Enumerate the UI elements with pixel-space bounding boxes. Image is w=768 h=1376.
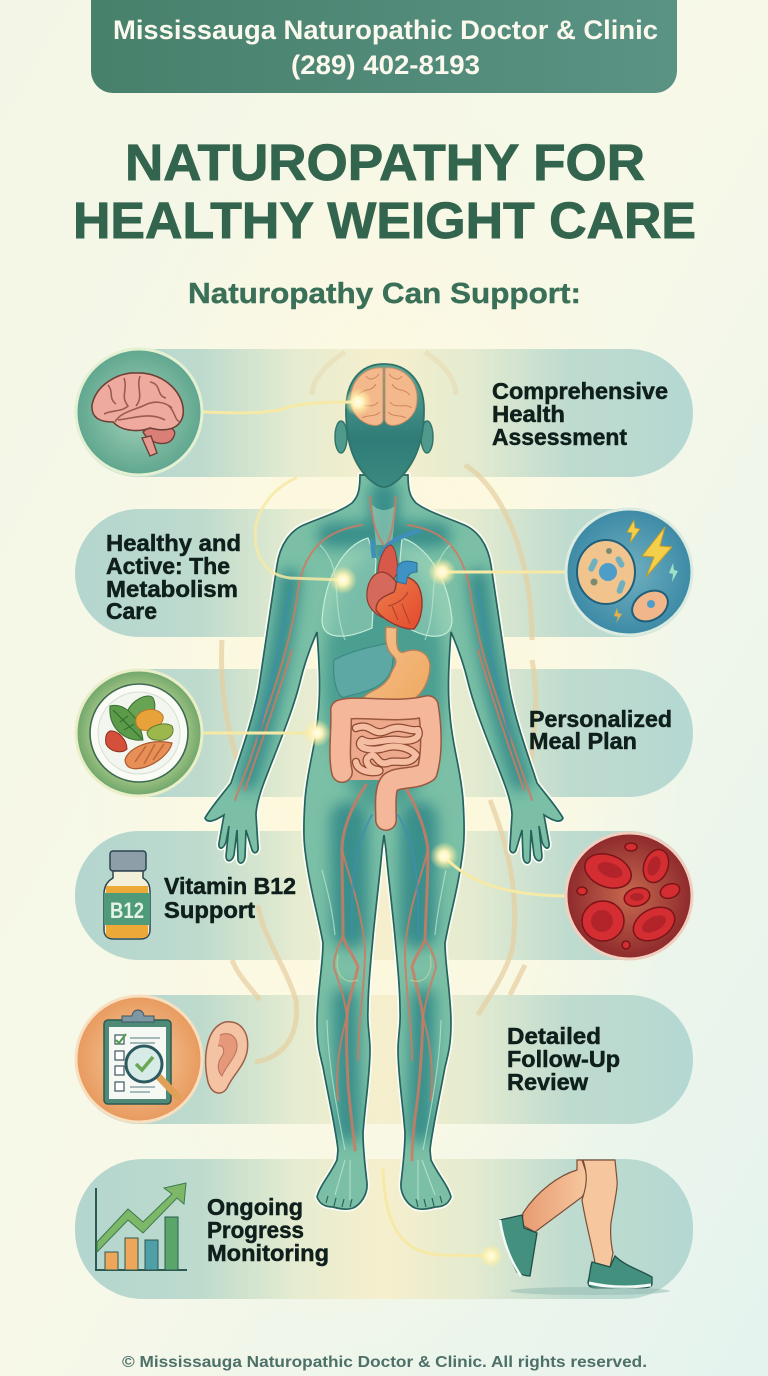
label: metabolism care: Healthy and: [106, 530, 241, 556]
body silhouette: [205, 475, 563, 1209]
label: comprehensive health assessment: Health: [492, 401, 565, 427]
icon: clipboard with magnifier: [76, 996, 202, 1122]
icon: walking legs: [500, 1160, 670, 1295]
label: metabolism care: Care: [106, 598, 157, 624]
heart: [367, 531, 422, 629]
header banner: (289) 402-8193: [291, 50, 480, 80]
label: ongoing progress monitoring: [207, 1194, 329, 1266]
icon: brain: [76, 349, 202, 475]
label: ongoing progress monitoring: Ongoing: [207, 1194, 303, 1220]
label: vitamin B12 support: Vitamin B12: [164, 873, 296, 899]
label: comprehensive health assessment: Assessment: [492, 424, 627, 450]
title: [73, 134, 696, 249]
title: HEALTHY WEIGHT CARE: [73, 192, 696, 249]
label: ongoing progress monitoring: Progress: [207, 1217, 304, 1243]
icon: vitamin B12 bottle: [104, 851, 150, 939]
label: personalized meal plan: [529, 706, 672, 754]
icon: healthy food plate: [76, 670, 202, 796]
icon: red blood cells: [566, 833, 692, 959]
human body figure: [205, 364, 563, 1209]
liver: [334, 642, 395, 697]
header banner: [91, 0, 677, 93]
label: metabolism care: Metabolism: [106, 576, 238, 602]
label: detailed follow-up review: [507, 1023, 620, 1095]
head: [335, 364, 433, 487]
icon: cell and energy: [566, 509, 692, 635]
label: metabolism care: Active: The: [106, 553, 230, 579]
icon: vitamin B12 bottle: B12: [110, 898, 144, 923]
lungs: [322, 538, 452, 636]
label: personalized meal plan: Personalized: [529, 706, 672, 732]
label: metabolism care: [106, 530, 241, 624]
stomach: [362, 627, 430, 706]
label: detailed follow-up review: Detailed: [507, 1023, 601, 1049]
icon: ear: [206, 1022, 248, 1093]
label: vitamin B12 support: [164, 873, 296, 923]
title: NATUROPATHY FOR: [125, 134, 645, 191]
label: comprehensive health assessment: Comprehensive: [492, 378, 668, 404]
connector lines with glowing dots: [203, 388, 566, 1268]
label: ongoing progress monitoring: Monitoring: [207, 1240, 329, 1266]
label: detailed follow-up review: Review: [507, 1069, 588, 1095]
label: detailed follow-up review: Follow-Up: [507, 1046, 620, 1072]
subheading: Naturopathy Can Support:: [188, 278, 581, 310]
pill backgrounds: [75, 349, 693, 1299]
label: comprehensive health assessment: [492, 378, 668, 450]
footer copyright: © Mississauga Naturopathic Doctor & Clinic. All rights reserved.: [122, 1354, 647, 1371]
blood vessels: [235, 497, 532, 1207]
label: vitamin B12 support: Support: [164, 897, 255, 923]
header banner: Mississauga Naturopathic Doctor & Clinic: [113, 15, 658, 45]
decorative energy arcs: [222, 352, 536, 1062]
label: personalized meal plan: Meal Plan: [529, 728, 637, 754]
intestines: [340, 706, 431, 820]
icon: growth bar chart: [96, 1183, 187, 1270]
brain in head: [351, 368, 417, 425]
